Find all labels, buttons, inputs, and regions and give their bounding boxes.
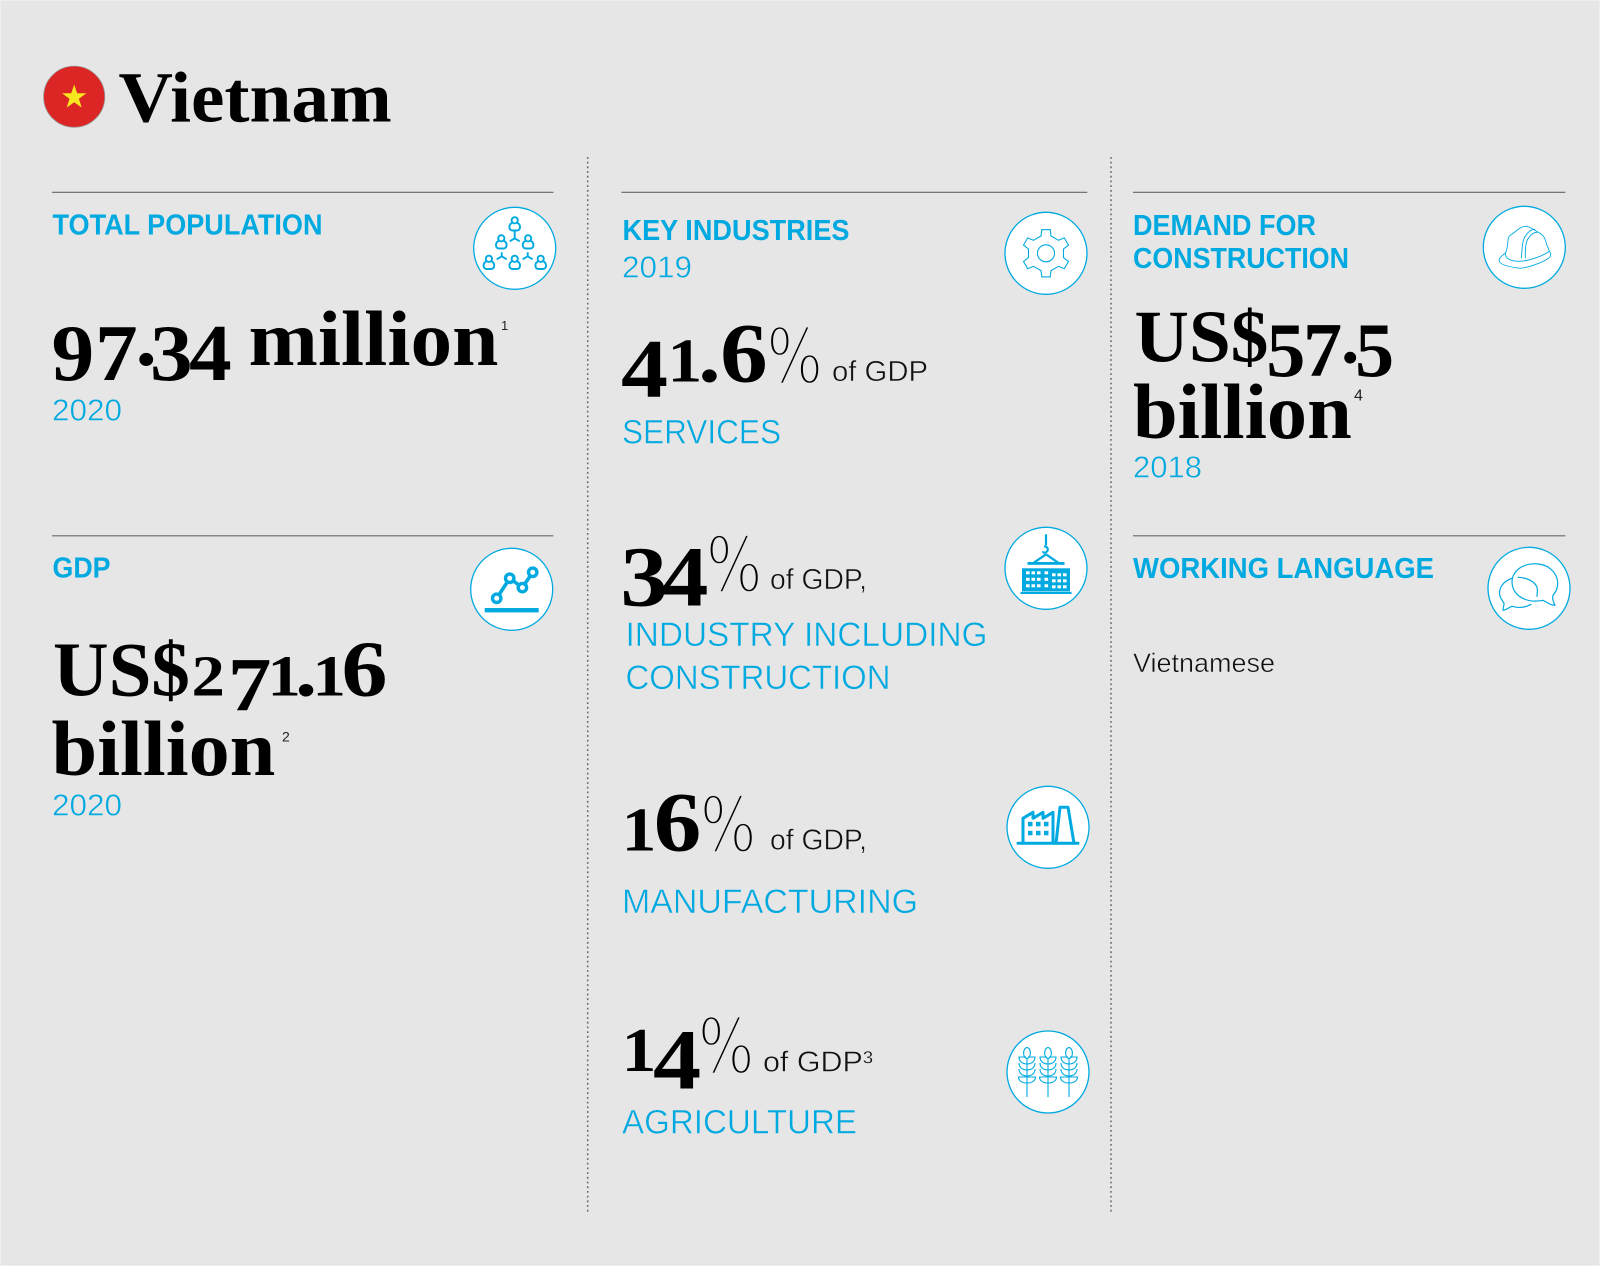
footnote 1: 1 bbox=[501, 318, 508, 333]
column divider: right bbox=[1110, 157, 1112, 1213]
body: Vietnamese: Vietnamese bbox=[1133, 648, 1275, 678]
value: population: 7 bbox=[95, 308, 138, 397]
value: GDP: US$ bbox=[53, 627, 190, 713]
of GDP: of GDP, bbox=[770, 564, 867, 596]
percent sign: % bbox=[706, 521, 762, 611]
stat: industry including construction bbox=[620, 521, 1087, 697]
of GDP: of GDP³ bbox=[763, 1047, 873, 1079]
label: industry including construction: INDUSTRY INCLUDING bbox=[626, 616, 988, 654]
icon: crane and building bbox=[1005, 527, 1087, 609]
panel: working language bbox=[1133, 536, 1570, 678]
value: GDP: 1 bbox=[312, 644, 346, 709]
value: population: million bbox=[249, 296, 498, 382]
panel: GDP bbox=[52, 536, 553, 823]
label: agriculture: AGRICULTURE bbox=[622, 1104, 857, 1142]
label: manufacturing: MANUFACTURING bbox=[622, 883, 918, 921]
year: 2018: 2018 bbox=[1133, 451, 1202, 485]
year: 2019: 2019 bbox=[622, 251, 692, 285]
flag icon: Vietnam bbox=[44, 66, 105, 127]
panel: key industries bbox=[620, 192, 1089, 1142]
panel: total population bbox=[51, 192, 556, 428]
value: population: · bbox=[132, 314, 161, 403]
icon: speech bubbles bbox=[1488, 547, 1570, 629]
icon: factory bbox=[1007, 786, 1089, 868]
value: population: 4 bbox=[189, 308, 232, 397]
percent sign: % bbox=[700, 781, 756, 871]
value: 14: 4 bbox=[653, 1012, 701, 1107]
year: 2020: 2020 bbox=[52, 394, 122, 428]
heading: demand for construction: DEMAND FOR bbox=[1133, 210, 1316, 242]
heading: key industries: KEY INDUSTRIES bbox=[622, 215, 850, 247]
value: GDP: 7 bbox=[228, 642, 271, 727]
heading: demand for construction: CONSTRUCTION bbox=[1133, 243, 1349, 275]
footnote 4: 4 bbox=[1354, 388, 1363, 405]
value: demand: 5 bbox=[1266, 308, 1305, 393]
value: 34: 3 bbox=[620, 529, 668, 625]
value: GDP: 6 bbox=[342, 624, 388, 713]
value: demand: · bbox=[1338, 317, 1362, 397]
value: GDP: . bbox=[295, 627, 317, 712]
percent sign: % bbox=[766, 313, 823, 403]
value: 14: 1 bbox=[622, 1016, 656, 1085]
value: 41.6: . bbox=[698, 311, 721, 400]
icon: people network bbox=[474, 207, 556, 289]
footnote 2: 2 bbox=[282, 729, 290, 745]
value: population: 3 bbox=[150, 308, 193, 397]
value: demand: 7 bbox=[1303, 308, 1342, 393]
value: GDP bbox=[52, 624, 388, 793]
title: Vietnam bbox=[118, 57, 392, 137]
value: demand bbox=[1133, 296, 1394, 456]
stat: manufacturing bbox=[622, 775, 1089, 921]
label: industry including construction: CONSTRUCTION bbox=[626, 659, 890, 697]
value: demand: billion bbox=[1133, 369, 1352, 456]
icon: hard hat bbox=[1483, 206, 1565, 288]
value: 16: 1 bbox=[622, 796, 656, 865]
value: 41.6: 6 bbox=[720, 306, 768, 401]
label: services: SERVICES bbox=[622, 413, 781, 451]
value: GDP: 1 bbox=[267, 644, 301, 709]
heading: total population: TOTAL POPULATION bbox=[52, 210, 322, 242]
value: population: 9 bbox=[51, 308, 94, 397]
of GDP: of GDP, bbox=[770, 824, 867, 856]
of GDP: of GDP bbox=[832, 356, 928, 388]
value: GDP: 2 bbox=[191, 644, 225, 709]
percent sign: % bbox=[698, 1003, 754, 1093]
value: demand: 5 bbox=[1355, 308, 1394, 393]
stat: agriculture bbox=[622, 1003, 1089, 1142]
value: 41.6: 1 bbox=[668, 327, 702, 396]
heading: GDP: GDP bbox=[52, 553, 110, 585]
value: 16: 6 bbox=[654, 775, 701, 870]
icon: line chart bbox=[471, 548, 553, 630]
value: GDP: billion bbox=[52, 707, 275, 793]
value: 34: 4 bbox=[661, 529, 708, 625]
panel: demand for construction bbox=[1133, 192, 1565, 485]
value: 41.6: 4 bbox=[621, 324, 668, 416]
icon: gear bbox=[1005, 212, 1087, 294]
heading: working language: WORKING LANGUAGE bbox=[1133, 553, 1434, 585]
year: 2020: 2020 bbox=[52, 789, 122, 823]
stat: services bbox=[621, 306, 928, 451]
value: demand: US$ bbox=[1134, 296, 1268, 379]
column divider: left bbox=[587, 157, 589, 1213]
icon: wheat bbox=[1007, 1031, 1089, 1113]
